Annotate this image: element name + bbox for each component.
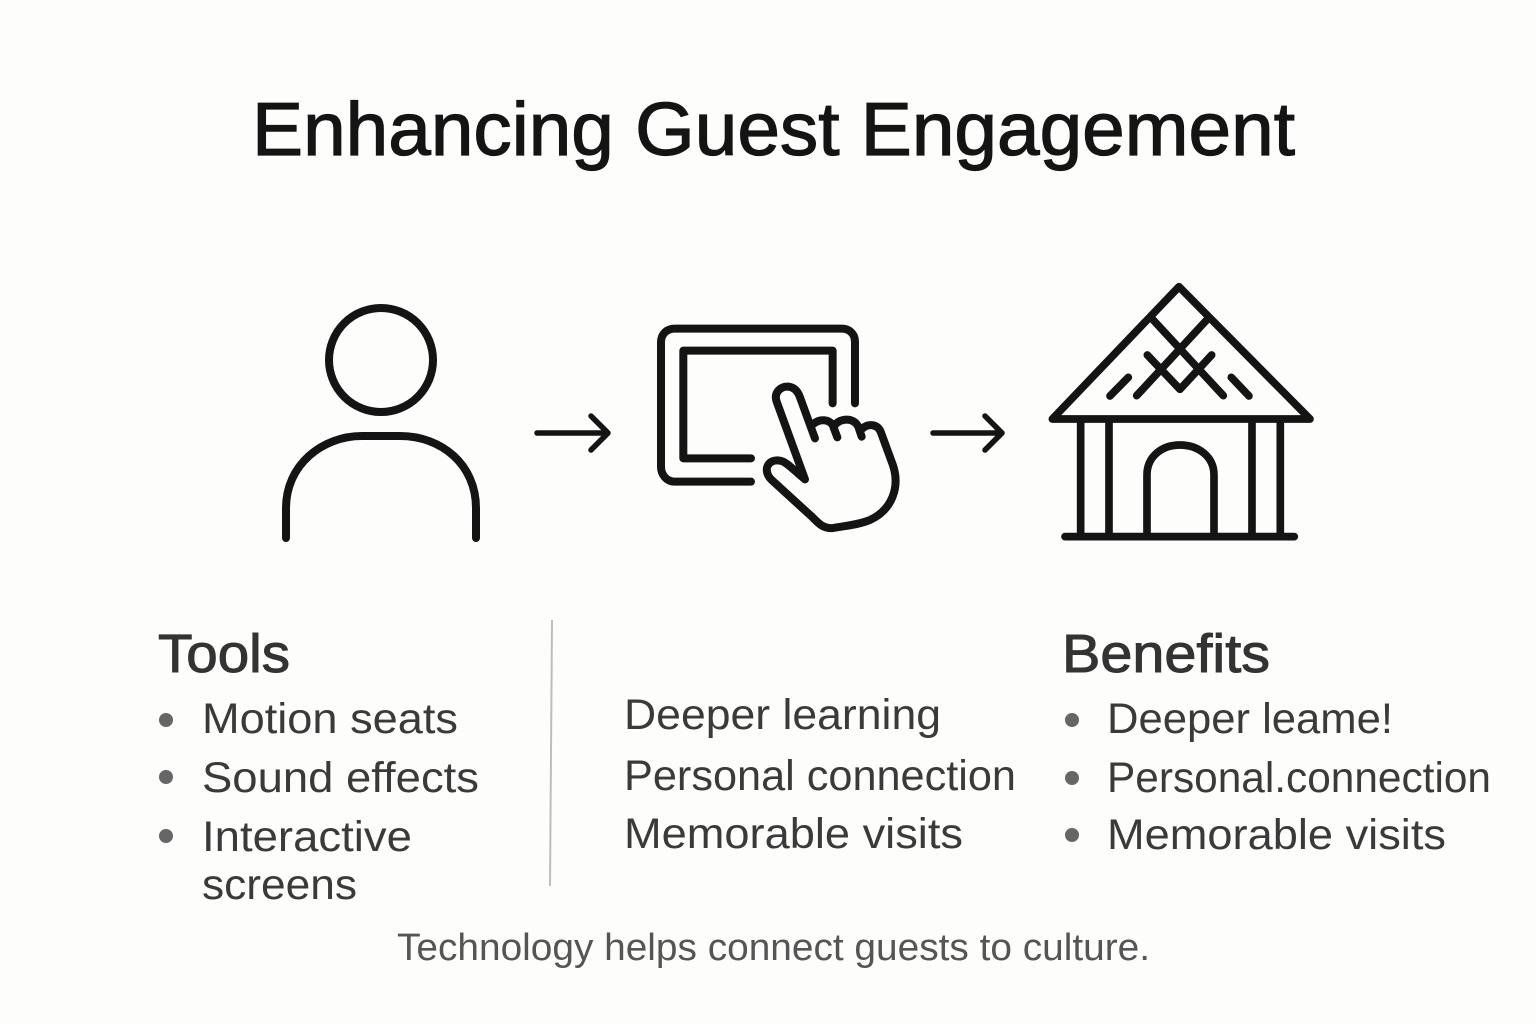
footer caption: Technology helps connect guests to culture. [397,927,1150,969]
list item: motion seats: Motion seats [202,695,458,743]
list item: memorable visits: Memorable visits [1107,811,1446,859]
title: Enhancing Guest Engagement [252,87,1295,171]
icon: cultural house [1052,287,1310,537]
icon: person [286,308,476,538]
heading: benefits: Benefits [1062,624,1270,684]
heading: tools: Tools [158,624,290,684]
list item: interactive screens: screens [202,861,357,909]
text: memorable visits: Memorable visits [624,810,963,858]
panel: tools [158,624,479,909]
panel: benefits [1062,624,1491,859]
arrow: screen to house [933,416,1002,450]
icon: touch screen with pointing hand [661,329,896,528]
list item: sound effects: Sound effects [202,754,479,802]
list item: deeper learner: Deeper leame! [1107,695,1393,743]
list item: interactive screens [159,813,412,909]
arrow: person to screen [537,416,608,450]
list item: interactive screens: Interactive [202,813,412,861]
panel: middle list [624,691,1016,858]
list item: personal connection: Personal.connection [1107,754,1491,802]
text: deeper learning: Deeper learning [624,691,941,739]
text: personal connection: Personal connection [624,752,1016,800]
